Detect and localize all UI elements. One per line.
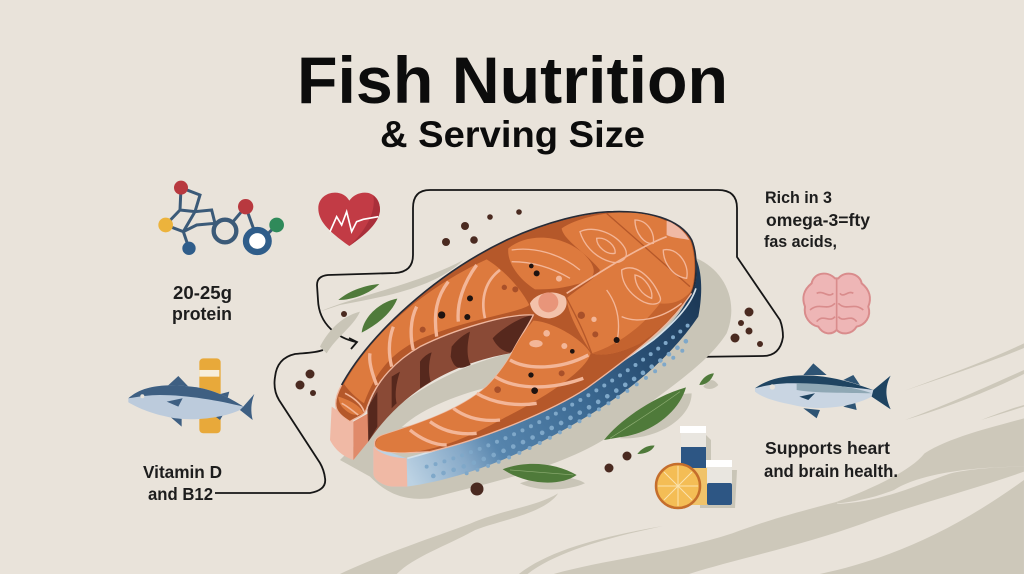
label: vitamins: and B12 [148, 484, 213, 504]
cut surface of salmon [336, 212, 696, 453]
front face of upper arm [330, 407, 368, 460]
dark outer edge [342, 212, 696, 385]
steak shadow [340, 258, 731, 499]
connector: omega-3 line to salmon [317, 190, 783, 362]
connector: vitamin line to salmon [215, 350, 325, 493]
label: protein: 20-25g [173, 283, 232, 303]
label: omega-3: fas acids, [764, 232, 837, 251]
title: Fish Nutrition [297, 43, 728, 117]
label: omega-3 [764, 188, 870, 251]
salmon steak [330, 212, 731, 499]
subtitle: & Serving Size [380, 114, 645, 155]
label: omega-3: Rich in 3 [765, 188, 832, 207]
skin scales [427, 325, 692, 476]
icon: supplement bottles and orange slice [656, 426, 737, 508]
label: vitamins [143, 462, 222, 504]
icon: molecule [158, 181, 284, 255]
peppercorns [296, 209, 763, 495]
sand dunes bottom right [340, 343, 1024, 574]
flesh lobes [338, 213, 694, 452]
label: protein: protein [172, 304, 232, 324]
icon: brain [803, 274, 870, 333]
label: heart and brain: and brain health. [764, 461, 898, 481]
icon: mackerel fish [755, 363, 891, 418]
darker flesh shading and pale corner [567, 213, 691, 355]
icon: fish with vitamin capsule [128, 358, 254, 433]
centre bone [530, 292, 567, 318]
label: protein [172, 283, 232, 324]
brown flesh spots [420, 285, 598, 393]
light flesh spots [529, 276, 597, 349]
icon: heart with pulse [318, 193, 380, 246]
skin band [373, 260, 701, 487]
gap between the steak arms [402, 387, 490, 427]
flesh speckles [438, 264, 620, 394]
inner wall of the cut [367, 315, 533, 442]
label: omega-3: omega-3=fty [766, 210, 870, 230]
flesh stripes [342, 220, 687, 445]
label: heart and brain: Supports heart [765, 438, 890, 458]
leaves and shadows near salmon [320, 260, 718, 490]
label: vitamins: Vitamin D [143, 462, 222, 482]
pink end of skin band [373, 447, 407, 487]
skin highlight [407, 288, 696, 458]
label: heart and brain [764, 438, 898, 481]
